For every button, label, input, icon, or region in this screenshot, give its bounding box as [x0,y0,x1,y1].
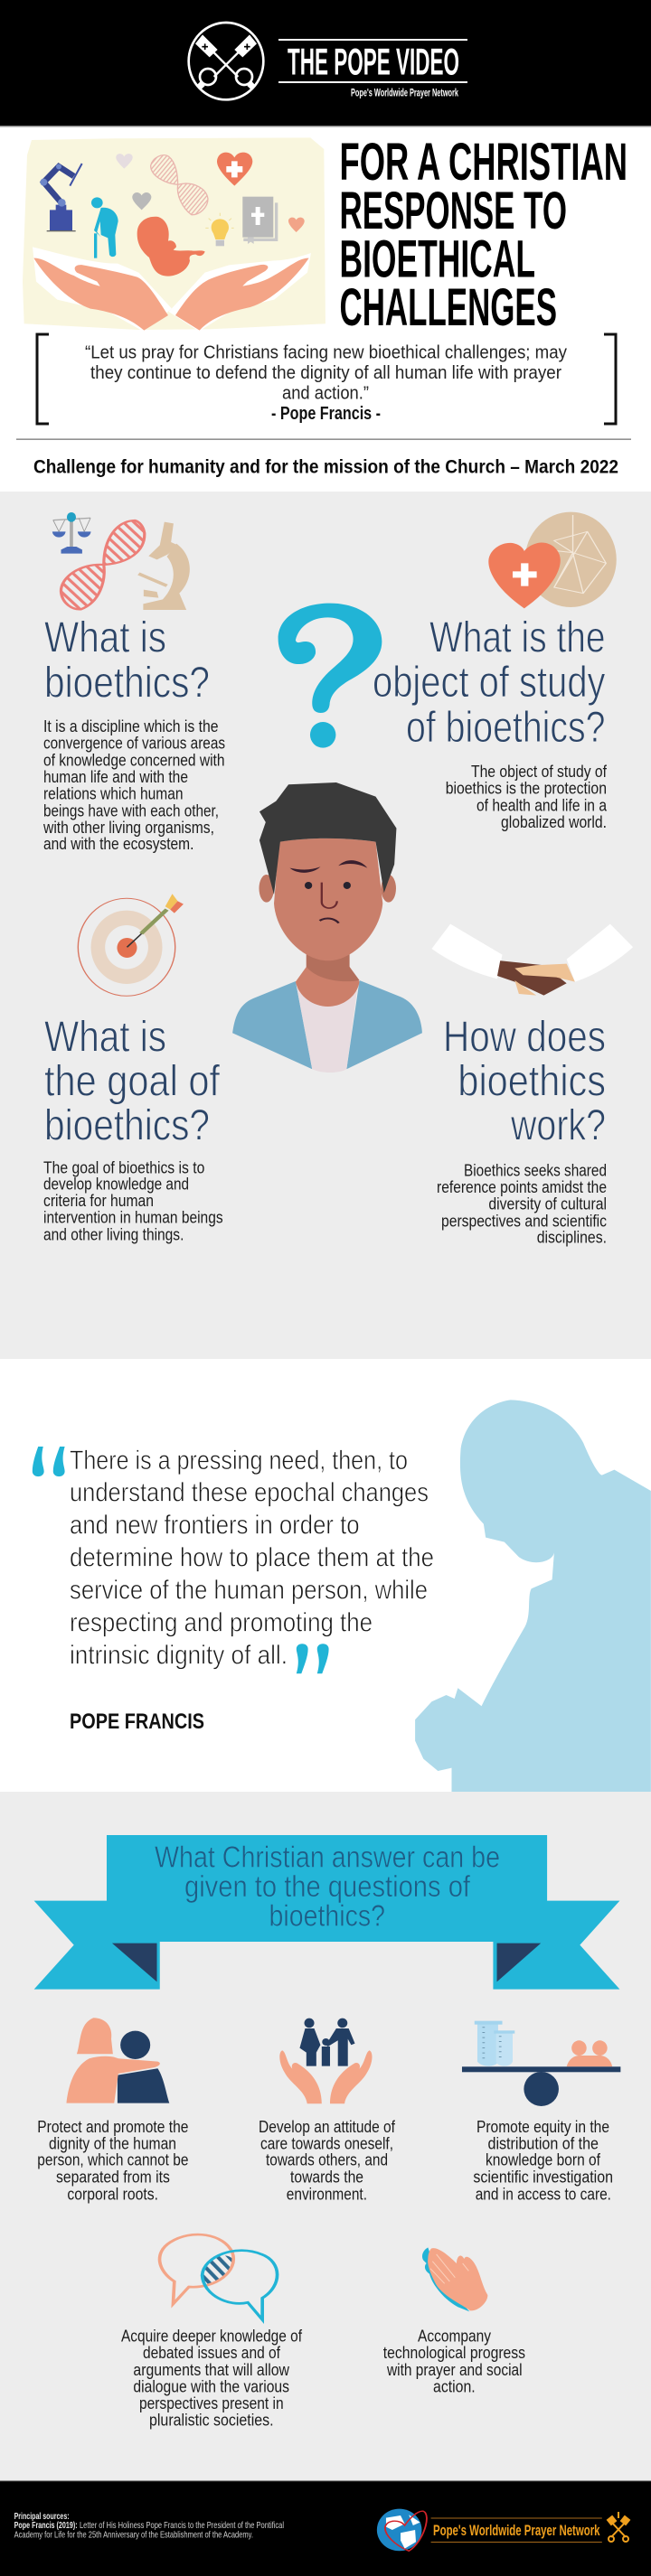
icon: handshake [431,924,633,996]
answer: deeper knowledge: Acquire deeper knowledge of [121,2328,303,2346]
icon: elderly man [91,197,118,258]
icon: scales [52,512,91,554]
answer: attitude of care [259,2019,396,2203]
answer: protect dignity: Protect and promote the [37,2118,188,2136]
icon: bible [242,197,278,244]
quote with brackets [37,334,616,424]
answer: deeper knowledge: arguments that will allow [133,2361,290,2379]
answer: promote equity: distribution of the [488,2134,599,2152]
text block: how does bioethics work: Bioethics seeks shared [464,1162,607,1180]
quote text: intrinsic dignity of all. [70,1640,288,1670]
text block: object of study: of health and life in a [476,796,608,814]
text block: goal of bioethics: the goal of [44,1057,221,1105]
icon: robot arm [40,164,82,231]
text block: goal of bioethics [43,1013,223,1243]
quote with brackets: “Let us pray for Christians facing new bioethical challenges; may [85,343,567,363]
answer: attitude of care: environment. [287,2185,367,2203]
answer: accompany progress: action. [433,2377,476,2395]
ribbon heading: What Christian answer can be [155,1841,500,1874]
panel: Pope Francis quote [0,1359,651,1792]
ribbon heading [34,1835,619,1990]
text block: what is bioethics: and with the ecosystem. [43,835,193,853]
answer: deeper knowledge: perspectives present in [139,2394,284,2412]
text block: goal of bioethics: What is [44,1013,166,1061]
text block: what is bioethics: It is a discipline which is the [43,717,219,735]
icon: globe and heart [488,512,617,608]
text block: what is bioethics: What is [44,614,166,662]
icon: DNA [61,520,145,609]
illustration: bioethics themes held by hands [23,137,326,332]
text block: what is bioethics: human life and with the [43,768,188,786]
icon: question mark [278,604,382,748]
icon: crossed keys logo [189,23,263,99]
answer: accompany progress: Accompany [418,2328,491,2346]
text block: goal of bioethics: bioethics? [44,1102,210,1150]
text block: what is bioethics: convergence of various areas [43,735,225,753]
sources: Letter of His Holiness Pope Francis to the President of the Pontifical [80,2520,284,2531]
text block: object of study: bioethics is the protection [446,780,607,798]
text block: what is bioethics: with other living organisms, [42,819,214,837]
attribution: POPE FRANCIS [70,1710,204,1734]
icon: overlapping speech bubbles [160,2234,278,2319]
icon: balance with test tubes and people [462,2021,620,2106]
icon: two people embracing [66,2018,169,2103]
answer: accompany progress: with prayer and social [386,2361,523,2379]
quote with brackets: they continue to defend the dignity of all human life with prayer [90,363,561,383]
icon: open hands [33,247,311,332]
icon: fetus [137,217,205,276]
icon: family in hands [279,2019,373,2103]
text block: object of study: What is the [429,614,606,662]
quote text: and new frontiers in order to [70,1511,360,1541]
icon: DNA strand [151,155,208,215]
quote text: respecting and promoting the [70,1607,373,1637]
text block: goal of bioethics: and other living things. [43,1225,184,1243]
brand name: Pope's Worldwide Prayer Network [351,89,458,99]
title: BIOETHICAL [340,229,535,289]
icon: orange crossed keys [608,2512,629,2542]
quote text: determine how to place them at the [70,1542,434,1572]
answer: deeper knowledge [121,2234,303,2430]
sources: Principal sources: [14,2511,70,2522]
illustration: thinking man [232,782,422,1073]
text block: how does bioethics work: How does [443,1013,606,1061]
quote text: There is a pressing need, then, to [70,1446,408,1475]
answer: accompany progress [383,2247,525,2395]
icon: microscope [138,522,190,610]
answer: protect dignity: separated from its [56,2169,170,2187]
quote text: service of the human person, while [70,1575,428,1605]
text block: object of study: globalized world. [501,813,607,831]
panel: four questions [0,492,651,1359]
answer: deeper knowledge: dialogue with the various [133,2377,289,2395]
header band [0,0,651,126]
answer: promote equity: Promote equity in the [476,2118,609,2136]
answer: attitude of care: Develop an attitude of [259,2118,396,2136]
text block: goal of bioethics: criteria for human [43,1192,154,1210]
illustration: praying Pope silhouette [415,1400,651,1792]
icons and person [52,512,633,1073]
answer: promote equity: and in access to care. [476,2185,611,2203]
title [340,133,627,337]
quote with brackets: - Pope Francis - [271,404,381,424]
text block: goal of bioethics: intervention in human beings [43,1208,223,1226]
quote text [70,1446,434,1670]
answer: attitude of care: towards the [290,2169,363,2187]
text block: what is bioethics: of knowledge concerned with [43,751,224,769]
text block: object of study [373,614,608,831]
answer: protect dignity: corporal roots. [67,2185,158,2203]
panel: Christian answer [0,1792,651,2481]
quote with brackets: and action.” [282,383,369,403]
footer [0,2480,651,2576]
icon: target with arrow [78,894,184,996]
sources: Academy for Life for the 25th Anniversary of the Establishment of the Academy. [14,2529,253,2540]
answer: protect dignity: person, which cannot be [37,2151,188,2169]
text block: how does bioethics work: work? [510,1102,606,1150]
answer: promote equity: knowledge born of [486,2151,601,2169]
ribbon heading: given to the questions of [184,1869,471,1903]
text block: object of study: of bioethics? [406,704,606,752]
answer: attitude of care: towards others, and [266,2151,388,2169]
sources [14,2511,284,2540]
answer: attitude of care: care towards oneself, [260,2134,393,2152]
icon: quote marks [33,1447,329,1673]
icon: praying hands [422,2247,487,2311]
text block: how does bioethics work: perspectives and scientific [441,1212,607,1230]
text block: how does bioethics work: diversity of cultural [488,1194,607,1213]
sources: Pope Francis (2019): [14,2520,78,2531]
answer: deeper knowledge: pluralistic societies. [149,2412,274,2430]
text block: what is bioethics: beings have with each other, [43,801,219,820]
text block: object of study: object of study [373,659,606,707]
icon: globe and heart logo [377,2509,427,2551]
text block: what is bioethics: relations which human [43,785,183,803]
brand name: THE POPE VIDEO [288,41,459,83]
ribbon heading: bioethics? [269,1899,385,1933]
answer: protect dignity: dignity of the human [49,2134,176,2152]
text block: goal of bioethics: develop knowledge and [43,1176,189,1194]
text block: how does bioethics work: bioethics [458,1057,606,1105]
text block: how does bioethics work: disciplines. [537,1229,607,1247]
quote text: understand these epochal changes [70,1478,429,1508]
answer: promote equity [462,2021,620,2203]
icon: hearts [116,153,305,232]
icon: light bulb [205,213,234,246]
text block: what is bioethics: bioethics? [44,660,210,707]
answer: promote equity: scientific investigation [473,2169,613,2187]
text block: what is bioethics [42,614,225,853]
brand name [278,39,467,99]
answer: deeper knowledge: debated issues and of [143,2344,281,2362]
answer: accompany progress: technological progress [383,2344,525,2362]
answer: protect dignity [37,2018,188,2203]
text block: how does bioethics work [437,1013,607,1247]
text block: object of study: The object of study of [471,763,608,781]
text block: how does bioethics work: reference points amidst the [437,1178,607,1196]
text block: goal of bioethics: The goal of bioethics is to [43,1158,204,1176]
